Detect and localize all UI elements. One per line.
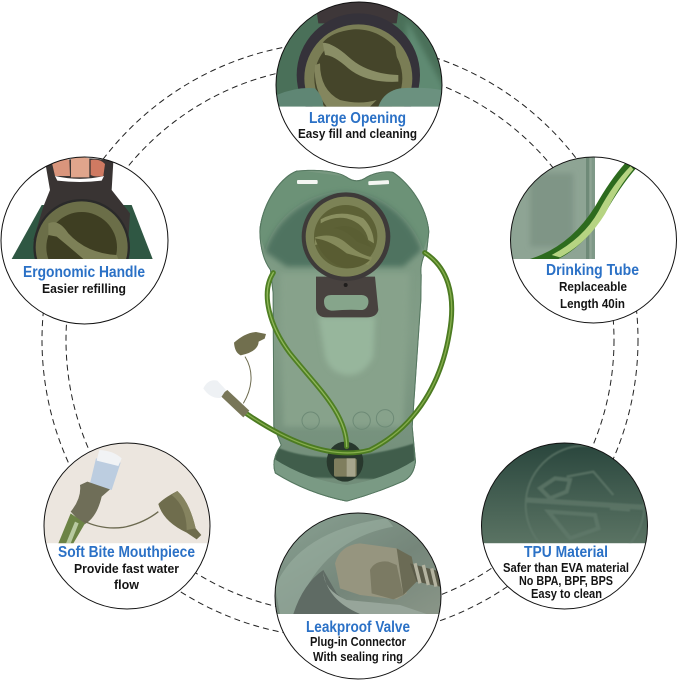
caption: replaceable: Replaceable: [559, 280, 627, 294]
photo: mouthpiece and cap: [44, 444, 210, 544]
panel: TPU material: [481, 442, 648, 610]
heading: leakproof valve: Leakproof Valve: [306, 619, 410, 636]
caption: easy fill: Easy fill and cleaning: [298, 127, 417, 141]
heading: drinking tube: Drinking Tube: [546, 262, 639, 279]
bladder body: [253, 163, 437, 503]
heading: ergonomic handle: Ergonomic Handle: [23, 264, 145, 281]
outline: [44, 443, 210, 609]
photo: large opening cap: [276, 2, 442, 107]
panel: large opening: [273, 0, 447, 173]
caption: provide fast water: Provide fast water: [74, 562, 179, 576]
caption: no BPA: No BPA, BPF, BPS: [519, 574, 613, 588]
outline: [510, 157, 676, 323]
outline: [482, 443, 648, 609]
caption: flow: flow: [114, 578, 139, 592]
caption: safer than EVA: Safer than EVA material: [503, 561, 629, 575]
panel: drinking tube: [507, 153, 676, 323]
photo: embossed material: [482, 444, 647, 544]
photo: valve close-up: [276, 514, 440, 614]
valve base: [327, 442, 363, 482]
panel: soft bite mouthpiece: [44, 442, 210, 610]
outline: [1, 157, 168, 324]
caption: length: Length 40in: [560, 297, 625, 311]
panel: ergonomic handle: [0, 156, 168, 324]
caption: easy to clean: Easy to clean: [531, 587, 602, 601]
mouthpiece and cap: [203, 332, 266, 417]
central hydration bladder: [203, 163, 452, 503]
heading: TPU material: TPU Material: [524, 544, 608, 561]
dashed connecting rings: [42, 42, 638, 638]
caption: easier refilling: Easier refilling: [42, 282, 126, 296]
caption: sealing ring: With sealing ring: [313, 650, 403, 664]
hanging slots: [297, 180, 389, 185]
cap and handle: [302, 192, 390, 317]
photo: tube close-up: [507, 153, 636, 259]
drinking tube: [246, 253, 452, 453]
outline: [276, 2, 442, 168]
heading: soft bite mouthpiece: Soft Bite Mouthpiece: [58, 544, 195, 561]
caption: plug-in connector: Plug-in Connector: [310, 635, 406, 649]
heading: large opening: Large Opening: [309, 110, 406, 127]
panel: leakproof valve: [270, 510, 443, 681]
photo: handle with fingers: [12, 158, 153, 259]
outline: [275, 513, 441, 679]
